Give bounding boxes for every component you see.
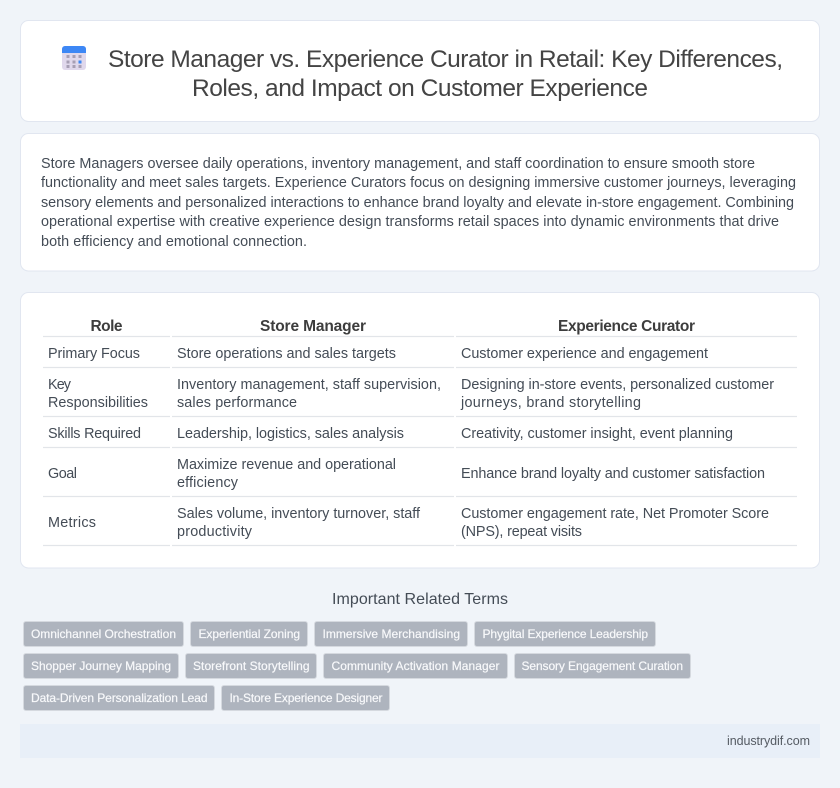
row: goal: efficiency — [177, 475, 239, 491]
tag list: related terms — [24, 622, 690, 710]
tag — [222, 686, 390, 710]
table header: Experience Curator — [558, 318, 695, 335]
row: primary focus: Customer experience and engagement — [461, 346, 708, 362]
text block: summary: sensory elements and personalized interactions to enhance brand loyalty and elevate in-store engagement. Combining — [41, 195, 794, 211]
tag: Experiential Zoning — [198, 627, 300, 641]
row: key responsibilities: journeys, brand storytelling — [460, 395, 641, 411]
row: key responsibilities: Responsibilities — [48, 395, 148, 411]
tag — [474, 622, 656, 646]
tag: Omnichannel Orchestration — [31, 627, 176, 641]
row: metrics: Customer engagement rate, Net Promoter Score — [461, 506, 769, 522]
row: metrics: Metrics — [48, 515, 96, 531]
tag: In-Store Experience Designer — [230, 691, 382, 705]
footer — [20, 724, 820, 758]
row: primary focus: Primary Focus — [48, 346, 140, 362]
tag: Sensory Engagement Curation — [522, 659, 683, 673]
table header: Role — [90, 318, 123, 335]
row: metrics — [48, 506, 769, 540]
row: goal: Enhance brand loyalty and customer satisfaction — [461, 466, 765, 482]
title: Roles, and Impact on Customer Experience — [192, 75, 648, 102]
row: skills required — [48, 426, 733, 442]
title: Store Manager vs. Experience Curator in Retail: Key Differences, — [108, 46, 783, 73]
tag — [24, 622, 184, 646]
tag: Data-Driven Personalization Lead — [31, 691, 208, 705]
heading: important related terms: Important Related Terms — [332, 591, 508, 608]
row: primary focus — [48, 346, 708, 362]
text block: summary: both efficiency and emotional connection. — [41, 234, 307, 250]
tag — [314, 622, 468, 646]
row: skills required: Skills Required — [48, 426, 141, 442]
text block: summary: Store Managers oversee daily operations, inventory management, and staff coordination to ensure smooth store — [41, 156, 755, 172]
tag: Phygital Experience Leadership — [482, 627, 648, 641]
tag — [24, 654, 178, 678]
row: goal — [48, 457, 765, 491]
row: key responsibilities: Designing in-store events, personalized customer — [461, 377, 774, 393]
text block: summary: operational expertise with creative experience design transforms retail spaces into dynamic environments that drive — [41, 214, 779, 230]
row: key responsibilities: sales performance — [177, 395, 297, 411]
table header — [90, 318, 695, 335]
text block: summary: functionality and meet sales targets. Experience Curators focus on designing immersive customer journeys, leveraging — [41, 175, 796, 191]
footer: industrydif.com — [727, 734, 810, 748]
row: key responsibilities: Key — [48, 377, 72, 393]
icon: calendar — [62, 46, 86, 70]
text block: summary — [41, 156, 796, 250]
row: primary focus: Store operations and sales targets — [177, 346, 396, 362]
row: skills required: Creativity, customer insight, event planning — [461, 426, 733, 442]
row: key responsibilities — [48, 377, 774, 411]
row: skills required: Leadership, logistics, sales analysis — [177, 426, 404, 442]
panel: summary paragraph — [20, 134, 820, 271]
row: metrics: (NPS), repeat visits — [461, 524, 582, 540]
table header: Store Manager — [260, 318, 366, 335]
tag — [24, 686, 214, 710]
row: key responsibilities: Inventory management, staff supervision, — [177, 377, 441, 393]
row: goal: Goal — [48, 466, 77, 482]
row: metrics: productivity — [177, 524, 253, 540]
tag: Immersive Merchandising — [322, 627, 460, 641]
tag: Community Activation Manager — [332, 659, 500, 673]
row: goal: Maximize revenue and operational — [177, 457, 396, 473]
panel: header — [20, 20, 820, 122]
tag: Shopper Journey Mapping — [31, 659, 171, 673]
tag — [324, 654, 508, 678]
row: metrics: Sales volume, inventory turnover, staff — [177, 506, 421, 522]
tag: Storefront Storytelling — [193, 659, 310, 673]
tag — [190, 622, 308, 646]
tag — [186, 654, 316, 678]
title — [108, 46, 783, 102]
panel: comparison table — [20, 292, 820, 568]
tag — [514, 654, 690, 678]
